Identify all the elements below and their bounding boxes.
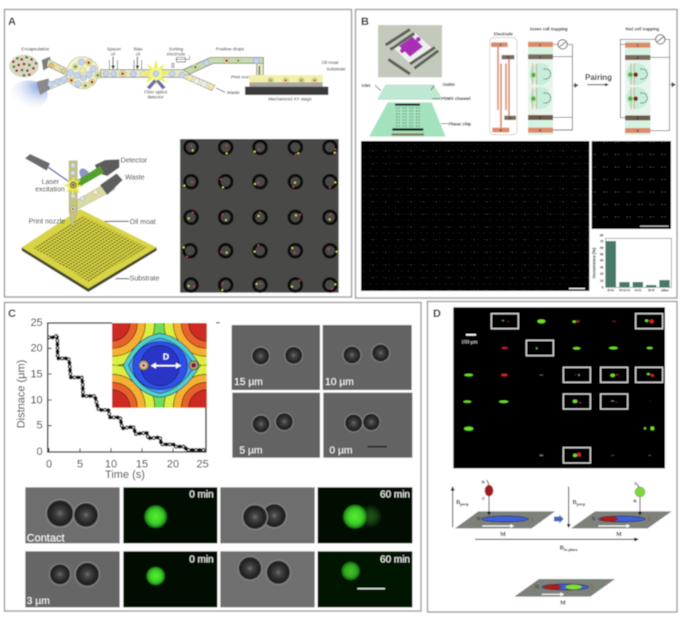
step 3: paired cells: S [590,585,594,591]
diagram: red cell trapping: 4 [637,129,640,133]
arrow: next step [554,515,564,523]
step 1: red cell onto magnetic pattern [451,480,555,538]
text: process labels: Sorting [169,47,184,52]
text: setup labels: Detector [121,158,148,165]
photo: device on holder [378,25,442,77]
bar chart: occurrence percentages: 60 [600,246,604,250]
micrograph: full trap array [361,141,589,291]
step 2: green cell onto magnetic pattern: S [647,517,651,523]
diagram: exploded chip layers: Planar chip [449,121,472,126]
contact fluorescence 60 min [318,487,412,543]
bar chart: occurrence percentages: 80 [600,233,604,237]
bar chart: occurrence percentages: 50 [600,252,604,256]
icon: mixing chamber with droplets [67,57,101,89]
panel: A droplet printing [4,10,352,297]
icon: cell suspension cluster [9,55,39,77]
icon: detector starburst [142,59,172,89]
axis labels: 5 [37,420,43,432]
contact bright-field 0 min [25,487,120,544]
red cells [501,319,654,457]
diagram: green cell trapping: 1 [539,43,541,47]
5 µm image [232,393,320,458]
icon: sorting electrode [172,55,189,67]
contact fluorescence 60 min: 60 min [380,489,410,500]
panel: D magnetic cell pairing [428,302,677,612]
step 2: green cell onto magnetic pattern: S [634,481,637,486]
step 1: red cell onto magnetic pattern: S [482,496,485,501]
axis labels: 15 [136,459,148,471]
bar chart: occurrence percentages: 30 [600,265,604,269]
10 µm image [323,325,412,390]
icon: laser plume [9,80,48,110]
text: process labels: Mechanized XY stage [268,96,312,101]
diagram: green cell trapping [528,26,578,135]
green cells [463,319,654,457]
diagram: electrode layout [490,31,517,135]
text: process labels: electrode [167,52,186,57]
axis labels: 0 [46,459,52,471]
bar chart: occurrence percentages: 0 [602,285,604,289]
diagram: red cell trapping: 2 [637,56,639,60]
bar chart: occurrence percentages: G+G [635,288,642,292]
diagram: main channel with spacer and bias inlets [101,57,263,92]
step 3: paired cells [514,579,615,606]
diagram: red cell trapping: 1 [637,44,639,48]
step 2: green cell onto magnetic pattern: N [633,498,636,503]
diagram: electrode layout: 4 [500,129,503,133]
step 2: green cell onto magnetic pattern: M [616,532,622,538]
text: process labels: Encapsulation [21,47,50,52]
micrographs and occurrence chart [361,141,671,292]
diagram: magnetic field pairing steps [451,480,672,606]
bar chart: occurrence percentages: R+G+O [619,288,631,292]
plot frame and ticks [48,323,206,452]
text: process labels: Spacer [107,47,122,52]
step 2: green cell onto magnetic pattern: perp [577,502,586,507]
bar chart: occurrence percentages: other [661,288,670,292]
panel: B cell trapping and pairing [356,10,677,298]
diagram: electrode layout: 1 [499,43,501,47]
schematic: chip and electrode layout [362,25,676,137]
text: process labels: Print nozzle [231,74,255,79]
axis labels: 10 [105,459,117,471]
text: process labels: Positive drops [216,47,245,52]
diagram: green cell trapping: Green cell trapping [530,26,568,31]
axis labels: Time (s) [105,469,145,481]
arrow: pairing: Pairing [585,73,612,82]
fluorescence image with paired-cell boxes [453,307,665,468]
text: process labels: Waste [227,90,240,95]
15 µm image: 15 µm [234,377,263,388]
bar chart: occurrence percentages: 70 [600,240,604,244]
diagram: red cell trapping: Red cell trapping [625,27,660,32]
schematic: droplet encapsulation and sorting line [9,47,346,110]
micrograph: printed droplet array [180,139,339,293]
bar chart: occurrence percentages: 10 [600,279,604,283]
axis labels: 25 [197,459,209,471]
step 1: red cell onto magnetic pattern: N [482,480,485,485]
icon: waste tube [74,173,123,209]
axis labels: Distnace (μm) [15,360,27,428]
3 µm fluorescence 60 min [318,551,412,607]
panel D label: D [433,308,441,320]
text: setup labels: Substrate [130,276,160,283]
3 µm bright-field 0 min [25,551,120,607]
panel A label: A [8,16,16,28]
contact bright-field 0 min: Contact [27,532,65,544]
3 µm fluorescence 0 min: 0 min [189,554,214,565]
icon: inlet tubes and nozzles [37,57,71,95]
panel C label: C [8,308,16,320]
text: process labels [21,47,346,101]
text: process labels: Oil moat [322,60,339,65]
scale bar: 100 μm [461,340,478,346]
text: setup labels: Laser [42,179,60,186]
scale bar [461,334,478,346]
3 µm fluorescence 0 min [123,551,217,607]
icon: laser source [25,154,69,182]
diagram: electrode layout: 2 [507,56,509,60]
contact fluorescence 0 min: 0 min [189,489,214,500]
bar chart: occurrence percentages: R+G [607,288,614,292]
diagram: red cell trapping [620,27,676,135]
step 3: paired cells: M [560,600,566,606]
text: process labels: Fiber optics [144,90,168,95]
10 µm image: 10 µm [325,377,354,388]
axis labels [15,317,209,481]
bar chart: occurrence percentages: Occurrence (%) [592,247,597,278]
3 µm bright-field 0 min: 3 µm [27,596,50,607]
in-plane field arrow: B [560,544,565,551]
diagram: exploded chip layers: Outlet [443,82,455,87]
bar chart: occurrence percentages: R+R [648,288,655,292]
in-plane field arrow [475,537,639,552]
diagram: electrode layout: 3 [509,116,511,120]
icon: print nozzle [69,161,77,226]
contact fluorescence 0 min [123,487,217,543]
schematic: print nozzle over substrate [22,139,339,293]
text: setup labels: Print nozzle [29,219,65,226]
bar chart: occurrence percentages: 40 [600,259,604,263]
contour inset: D [163,352,169,362]
axis labels: 15 [30,369,43,381]
text: process labels: oil [136,52,140,57]
step 1: red cell onto magnetic pattern: N [477,517,481,523]
axis labels: 25 [30,317,43,329]
micrographs: cell pairs at set distances [232,325,412,458]
panel B label: B [361,16,369,28]
contact bright-field 60 min [220,487,315,543]
diagram: exploded chip layers: PDMS channel [442,96,471,101]
diagram: exploded chip layers: Inlet [362,83,371,88]
diagram: electrode layout: Electrode [494,31,513,36]
3 µm bright-field 60 min [220,551,315,607]
3 µm fluorescence 60 min: 60 min [380,554,410,565]
15 µm image [232,325,320,390]
text: setup labels: Waste [125,175,145,182]
data series [49,335,204,450]
text: process labels: detector [148,95,164,100]
step 2: green cell onto magnetic pattern: B [572,499,577,506]
step 2: green cell onto magnetic pattern [567,481,672,538]
icon: excitation spark [63,177,83,195]
diagram: red cell trapping: 3 [637,116,639,120]
text: process labels: Substrate [326,66,346,71]
micrographs: dye transfer time-lapse [25,487,412,607]
contour inset [69,280,249,450]
step 1: red cell onto magnetic pattern: S [531,518,535,524]
5 µm image: 5 µm [239,445,263,456]
diagram: green cell trapping: 3 [539,116,541,120]
axis labels: 20 [167,459,179,471]
step 1: red cell onto magnetic pattern: M [500,532,506,538]
panel: C cell distance control [4,280,421,611]
arrow: pairing [585,73,612,86]
selection boxes [491,314,663,463]
axis labels: 10 [30,394,43,406]
axis labels: 0 [37,446,43,458]
diagram: green cell trapping: 4 [539,129,542,133]
icon: substrate plate [22,209,157,292]
line chart: distance over time [15,280,249,481]
bar chart: occurrence percentages: 20 [600,272,604,276]
axis labels: 5 [77,459,83,471]
micrograph: zoomed trap array [592,141,671,229]
axis labels: 20 [30,343,43,355]
text: process labels: oil [111,52,115,57]
step 2: green cell onto magnetic pattern: N [592,517,596,523]
0 µm image [323,393,412,458]
text: setup labels [29,158,160,283]
bar chart: occurrence percentages [592,233,671,292]
in-plane field arrow: in plane [564,547,578,552]
text: setup labels: excitation [35,186,65,193]
step 3: paired cells: N [535,585,539,591]
text: setup labels: Oil moat [130,219,156,226]
icon: detector barrel [75,159,119,187]
step 1: red cell onto magnetic pattern: perp [460,502,469,507]
step 1: red cell onto magnetic pattern: B [456,499,461,506]
diagram: print stage [245,75,328,95]
text: process labels: Bias [134,47,143,52]
diagram: exploded chip layers [362,82,472,137]
diagram: green cell trapping: 2 [539,55,541,59]
0 µm image: 0 µm [329,445,353,456]
